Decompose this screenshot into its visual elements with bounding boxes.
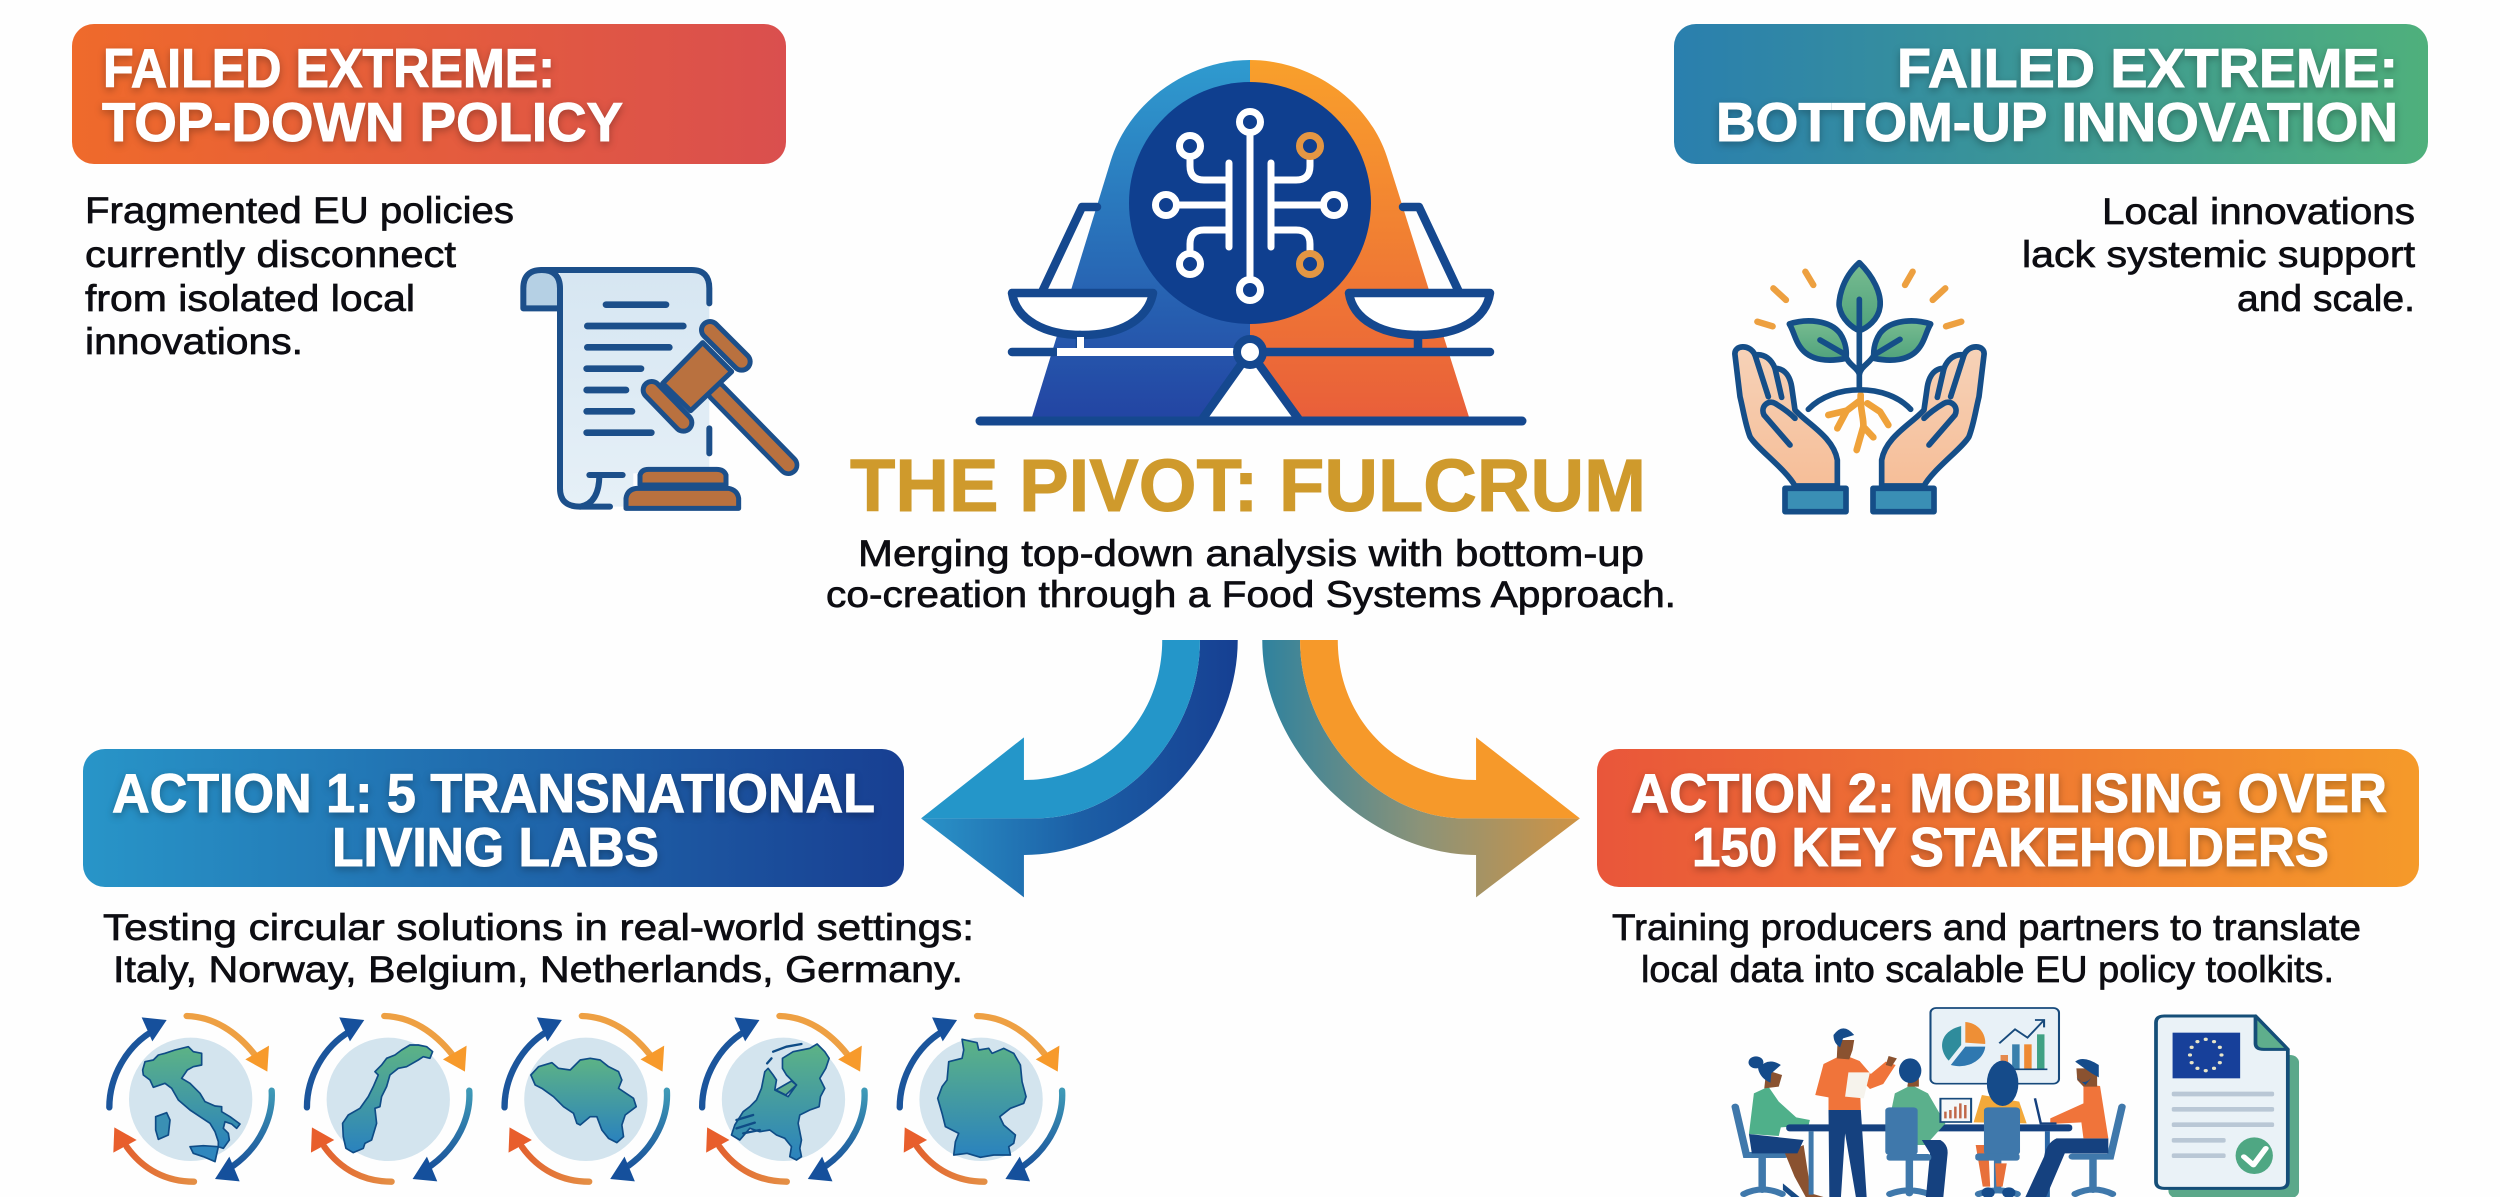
text: local innovations: lack systemic support	[2022, 234, 2416, 275]
panel: the pivot fulcrum	[826, 60, 1676, 615]
arrow: left curved arrow	[921, 640, 1238, 897]
arrow: right curved arrow	[1262, 640, 1580, 897]
text: pivot description: co-creation through a Food Systems Approach.	[826, 574, 1676, 615]
text: fragmented policies: from isolated local	[85, 278, 415, 319]
icon: eu policy document	[2156, 1016, 2299, 1197]
heading: bottom-up innovation: BOTTOM-UP INNOVATION	[1716, 91, 2398, 153]
panel: failed extreme top-down policy	[72, 24, 788, 508]
panel: action 2 stakeholders	[1597, 749, 2419, 1197]
heading: action 2	[1597, 749, 2419, 887]
heading: top-down policy: FAILED EXTREME:	[103, 37, 555, 99]
text: fragmented policies: Fragmented EU policies	[85, 190, 514, 231]
text: testing circular solutions: Italy, Norway, Belgium, Netherlands, Germany.	[113, 949, 963, 990]
text: training producers	[1612, 907, 2361, 990]
text: local innovations: and scale.	[2237, 278, 2415, 319]
text: training producers: local data into scalable EU policy toolkits.	[1641, 949, 2334, 990]
text: fragmented policies: innovations.	[85, 321, 303, 362]
scale frame	[980, 207, 1522, 421]
seated person right	[2025, 1059, 2108, 1197]
heading: bottom-up innovation: FAILED EXTREME:	[1897, 37, 2398, 99]
title: the pivot fulcrum: THE PIVOT: FULCRUM	[850, 444, 1646, 527]
circuit disc	[1129, 82, 1371, 324]
chairs	[1735, 1107, 2122, 1194]
icon: scroll and gavel	[523, 270, 788, 508]
heading: action 1	[83, 749, 904, 887]
text: local innovations: Local innovations	[2102, 191, 2415, 232]
laptop	[1940, 1099, 1971, 1122]
standing person	[1815, 1028, 1897, 1197]
text: testing circular solutions: Testing circular solutions in real-world settings:	[103, 907, 974, 948]
person back view yellow	[1974, 1061, 2027, 1197]
heading: action 1: ACTION 1: 5 TRANSNATIONAL	[112, 762, 875, 824]
icon: germany loop	[900, 1016, 1062, 1182]
icon: balance scale with circuit brain	[980, 60, 1522, 421]
heading: action 2: 150 KEY STAKEHOLDERS	[1692, 816, 2329, 878]
text: pivot description	[826, 533, 1676, 615]
icon: hands holding seedling	[1735, 263, 1984, 512]
heading: bottom-up innovation	[1674, 24, 2428, 164]
text: fragmented policies: currently disconnect	[85, 234, 457, 275]
text: testing circular solutions	[103, 907, 974, 990]
heading: top-down policy: TOP-DOWN POLICY	[102, 91, 623, 153]
illustration: meeting scene	[1735, 1008, 2122, 1197]
text: local innovations	[2022, 191, 2416, 319]
heading: action 1: LIVING LABS	[332, 816, 659, 878]
panel: failed extreme bottom-up innovation	[1674, 24, 2428, 512]
table	[1786, 1124, 2072, 1197]
text: training producers: Training producers and partners to translate	[1612, 907, 2361, 948]
seated person left	[1749, 1056, 1824, 1197]
whiteboard chart	[1930, 1008, 2059, 1084]
text: fragmented policies	[85, 190, 514, 362]
icon: belgium loop	[505, 1016, 667, 1182]
person back view green	[1885, 1058, 1948, 1197]
text: pivot description: Merging top-down analysis with bottom-up	[858, 533, 1644, 574]
panel: action 1 living labs	[83, 749, 1062, 1182]
arch	[1032, 60, 1469, 417]
icon: norway loop	[307, 1016, 469, 1182]
heading: top-down policy	[72, 24, 786, 164]
beam white segment	[1057, 337, 1263, 365]
icon: italy loop	[109, 1016, 272, 1182]
icon: netherlands loop	[702, 1016, 865, 1182]
heading: action 2: ACTION 2: MOBILISING OVER	[1631, 762, 2387, 824]
